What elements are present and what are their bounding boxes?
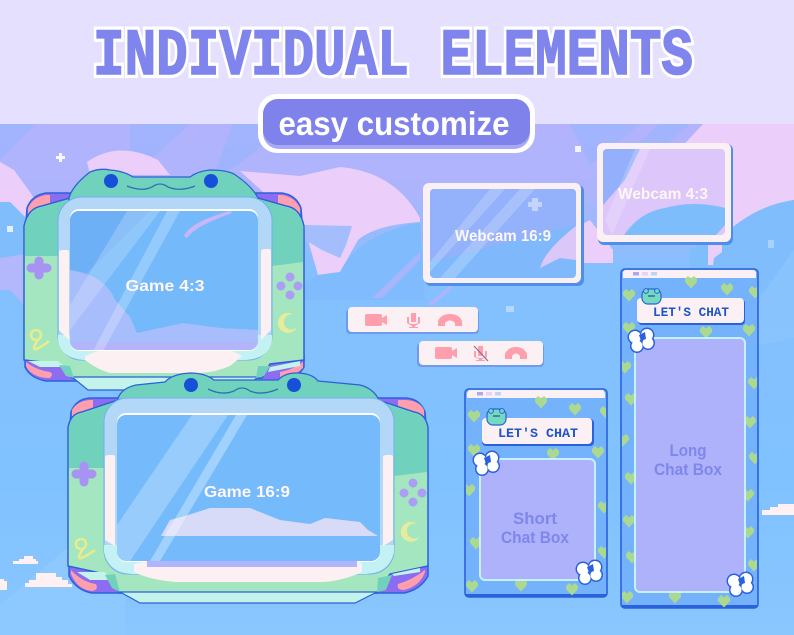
icon: camera — [435, 347, 457, 359]
webcam 16:9 — [423, 183, 584, 286]
d-pad — [31, 261, 47, 275]
icon: rose — [726, 572, 754, 597]
swirl — [31, 330, 49, 349]
game frame 16:9 — [68, 373, 428, 603]
button cluster — [400, 478, 426, 506]
game frame 4:3 — [24, 169, 304, 390]
label: Game 4:3 — [126, 278, 205, 295]
frog head — [118, 373, 378, 412]
moon — [278, 313, 297, 333]
short chat box — [463, 389, 612, 597]
short chat box: LET'S CHAT — [498, 426, 578, 441]
icon: frog — [642, 289, 661, 304]
blue clouds — [0, 202, 26, 258]
glass rim — [58, 197, 272, 360]
frog eyes — [104, 174, 218, 188]
shoulders — [70, 398, 426, 425]
icon: rose — [576, 560, 603, 585]
bottom gloss bar — [85, 351, 242, 373]
subtitle badge: easy customize — [278, 105, 510, 142]
icon: hang up — [438, 314, 462, 326]
icon: microphone — [407, 313, 420, 328]
chat area — [480, 459, 595, 580]
label: Chat Box — [654, 460, 722, 479]
title bar — [623, 270, 756, 278]
webcam 4:3: Webcam 4:3 — [618, 186, 708, 203]
long chat box — [617, 269, 761, 608]
icon: rose — [628, 328, 655, 353]
sparkles — [56, 153, 65, 162]
screen — [70, 209, 258, 351]
frog head — [69, 169, 258, 206]
icon: muted microphone — [474, 346, 488, 361]
title bar — [467, 390, 605, 398]
pink clouds — [0, 150, 170, 218]
screen — [117, 413, 380, 562]
label: Long — [670, 441, 706, 460]
bottom gloss bar — [134, 561, 362, 582]
subtitle badge — [258, 94, 535, 153]
d-pad — [76, 466, 92, 482]
swirl — [76, 539, 95, 558]
header band — [0, 0, 794, 124]
heading pill — [482, 419, 594, 446]
icon: frog — [487, 409, 506, 425]
icon: rose — [472, 450, 500, 476]
frog mouth — [208, 388, 278, 393]
label: Chat Box — [501, 528, 569, 547]
body — [24, 198, 304, 378]
white mini clouds — [13, 556, 38, 564]
call controls bar 2 — [417, 341, 544, 367]
webcam 4:3 — [597, 143, 733, 245]
label: Game 16:9 — [204, 484, 290, 501]
frog mouth — [127, 184, 195, 189]
glass rim — [104, 398, 394, 574]
call controls bar 1 — [346, 307, 479, 334]
heading pill — [638, 299, 745, 325]
lower skirt — [120, 592, 377, 603]
chat area — [635, 338, 745, 592]
lower skirt — [72, 377, 258, 390]
frog eyes — [184, 378, 301, 392]
webcam 16:9: Webcam 16:9 — [455, 228, 551, 245]
label: Short — [513, 509, 557, 528]
glass streaks — [117, 415, 228, 561]
moon — [401, 522, 420, 542]
button cluster — [276, 272, 302, 300]
body — [68, 400, 428, 593]
icon: hang up — [505, 347, 527, 359]
hearts — [463, 396, 612, 596]
shoulders — [26, 193, 302, 222]
icon: camera — [365, 314, 387, 326]
hearts — [617, 276, 761, 608]
glass streaks — [70, 211, 160, 330]
long chat box: LET'S CHAT — [653, 305, 729, 320]
